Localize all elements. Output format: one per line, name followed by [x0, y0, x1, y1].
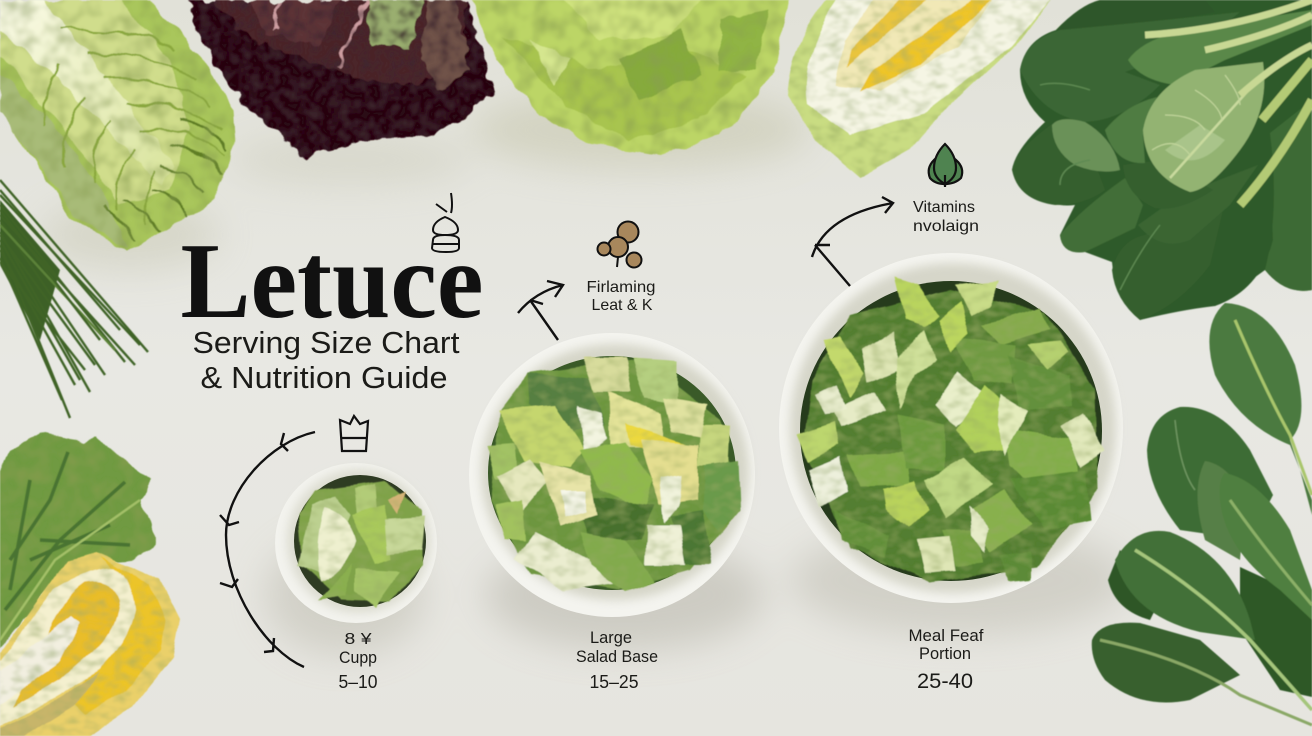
arrow: large bowl: [812, 197, 893, 286]
nutrient label: vitamins: Vitamins: [913, 199, 975, 216]
label: medium bowl: Salad Base: [576, 648, 658, 666]
label: small bowl: [338, 631, 378, 692]
icon: mineral circles: [598, 222, 642, 268]
label: medium bowl: [576, 629, 658, 692]
nutrient label: minerals: Firlaming: [586, 279, 656, 296]
arrow: medium bowl: [518, 281, 563, 340]
title: Letuce: [180, 222, 484, 341]
nutrient label: minerals: [586, 279, 656, 314]
nutrient label: minerals: Leat & K: [592, 297, 653, 314]
icon: vitamin leaf: [929, 144, 962, 187]
photo: spinach bunch top right: [1012, 0, 1312, 320]
subtitle: Serving Size Chart: [192, 326, 460, 360]
photo: spinach leaves bottom right: [1092, 303, 1312, 725]
medium bowl: [469, 333, 755, 617]
yellow napa cabbage halves: [0, 552, 180, 736]
photo: romaine lettuce top left: [0, 0, 235, 253]
large bowl lettuce pieces: [797, 277, 1105, 582]
nutrient label: vitamins: [913, 199, 979, 235]
large bowl: [779, 253, 1123, 603]
photo: halved napa cabbage: [787, 0, 1058, 178]
label: medium bowl: 15–25: [590, 671, 638, 692]
label: small bowl: 8 ¥: [344, 631, 372, 648]
arrow: small bowl arc: [220, 432, 315, 667]
label: large bowl: Portion: [919, 645, 971, 663]
photo: chives: [0, 180, 148, 418]
photo: red leaf lettuce: [187, 0, 493, 157]
icon: cup crown: [340, 416, 368, 451]
subtitle: [192, 326, 460, 395]
label: small bowl: Cupp: [339, 649, 377, 667]
small bowl lettuce pieces: [298, 480, 425, 608]
label: large bowl: 25-40: [917, 669, 973, 693]
photo: green leaf and napa bottom left: [0, 433, 180, 736]
medium bowl lettuce pieces: [487, 357, 740, 592]
photo: frilly green lettuce: [468, 0, 790, 155]
label: large bowl: [908, 627, 984, 693]
label: medium bowl: Large: [590, 629, 632, 647]
small bowl: [275, 463, 437, 623]
label: large bowl: Meal Feaf: [908, 627, 984, 645]
label: small bowl: 5–10: [338, 672, 378, 692]
icon: stacked bowl: [432, 193, 459, 252]
nutrient label: vitamins: nvolaign: [913, 218, 979, 235]
subtitle: & Nutrition Guide: [200, 361, 448, 395]
